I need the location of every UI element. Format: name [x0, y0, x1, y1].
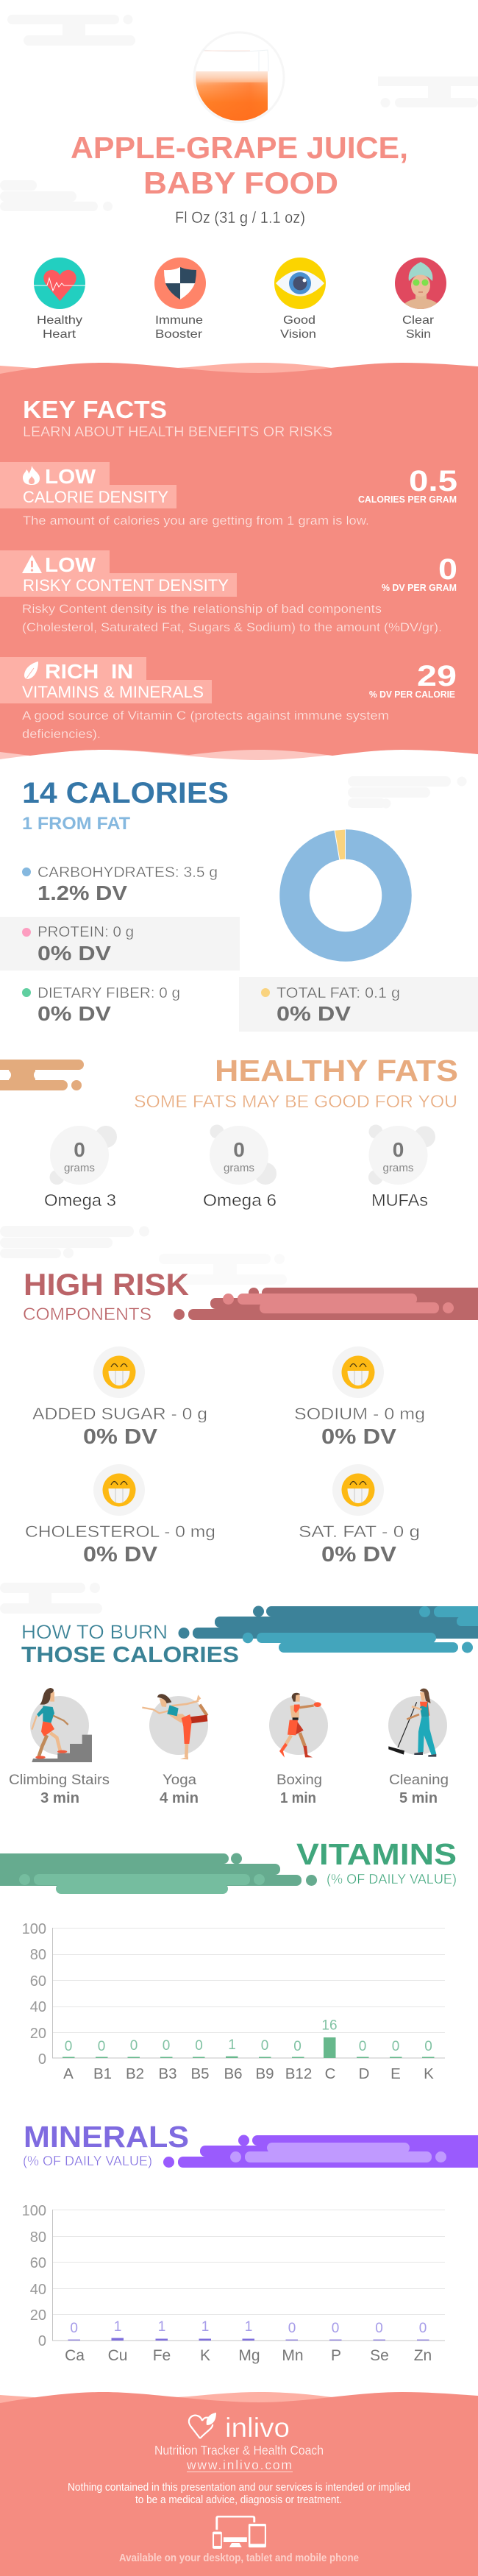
item: cholesterol: [25, 1464, 215, 1566]
bar chart: minerals: 0: [419, 2321, 427, 2336]
fact: rich in vitamins and minerals: RICH IN: [45, 660, 133, 683]
fact: risky content density: [0, 550, 457, 634]
fact: rich in vitamins and minerals: 29: [417, 660, 457, 692]
label: clear skin: Skin: [406, 328, 431, 341]
bar chart: minerals: 60: [30, 2255, 46, 2271]
label: clear skin: [402, 314, 435, 341]
bar chart: minerals: 0: [70, 2321, 78, 2336]
label: good vision: [280, 314, 316, 341]
item: added sugar: [32, 1346, 207, 1449]
bar chart: vitamins: 0: [163, 2038, 170, 2054]
bar chart: minerals: K: [200, 2347, 210, 2364]
donut chart: [294, 829, 397, 946]
fact: risky content density: 0: [438, 553, 457, 586]
bar chart: minerals: 20: [30, 2307, 46, 2324]
panel: minerals: [22, 2120, 478, 2364]
bar chart: vitamins: B3: [158, 2065, 177, 2082]
availability note: Available on your desktop, tablet and mobile phone: [119, 2552, 359, 2564]
decorative banner: green: [0, 1853, 317, 1894]
serving size: Fl Oz (31 g / 1.1 oz): [175, 208, 305, 227]
activity: boxing: 1 min: [280, 1790, 316, 1806]
bar chart: minerals: 1: [158, 2319, 165, 2335]
decorative banner: purple: [163, 2135, 478, 2168]
bar chart: vitamins: 60: [30, 1973, 46, 1990]
bar chart: vitamins: B12: [285, 2065, 312, 2082]
bar chart: vitamins: 0: [195, 2038, 203, 2054]
icon: flame: [23, 466, 40, 485]
benefit icons row: [34, 258, 446, 341]
fact: risky content density: % DV PER GRAM: [382, 582, 457, 593]
bar chart: minerals: Mn: [282, 2347, 304, 2364]
fact: calorie density: 0.5: [409, 465, 457, 497]
subheading: healthy fats: SOME FATS MAY BE GOOD FOR YOU: [134, 1092, 457, 1112]
bar chart: vitamins: 40: [30, 1999, 46, 2015]
title: APPLE-GRAPE JUICE,: [71, 130, 408, 165]
bar chart: minerals: 1: [201, 2319, 209, 2335]
legend: protein: 0% DV: [38, 942, 111, 965]
icon: warning triangle: [22, 555, 42, 573]
heading: healthy fats: HEALTHY FATS: [215, 1054, 458, 1087]
bar chart: vitamins: B5: [190, 2065, 210, 2082]
legend: protein: [22, 924, 134, 965]
fact: rich in vitamins and minerals: A good source of Vitamin C (protects against immune system: [22, 709, 389, 723]
label: immune booster: [155, 314, 203, 341]
panel: high risk components: [23, 1267, 478, 1566]
bar chart: vitamins: 0: [130, 2038, 138, 2054]
title: BABY FOOD: [143, 166, 338, 200]
panel: footer: [0, 2392, 478, 2576]
item: added sugar: 0% DV: [83, 1425, 158, 1449]
fact: calorie density: CALORIES PER GRAM: [358, 494, 457, 505]
title: [71, 130, 408, 200]
hero: juice glass photo: [194, 32, 284, 123]
activity: climbing stairs: [9, 1688, 110, 1806]
item: sodium: SODIUM - 0 mg: [294, 1405, 425, 1423]
stat: omega 3: 0: [74, 1138, 85, 1161]
stat: mufas: grams: [382, 1162, 413, 1174]
disclaimer: to be a medical advice, diagnosis or treatment.: [135, 2494, 342, 2506]
bar chart: minerals: Se: [370, 2347, 389, 2364]
heading: vitamins: VITAMINS: [296, 1837, 457, 1871]
bar chart: vitamins: B2: [126, 2065, 144, 2082]
tagline: Nutrition Tracker & Health Coach: [154, 2443, 324, 2458]
bar chart: minerals: P: [331, 2347, 341, 2364]
activity: yoga: Yoga: [163, 1772, 196, 1788]
icon: devices: [213, 2516, 266, 2549]
item: added sugar: ADDED SUGAR - 0 g: [32, 1405, 207, 1423]
fact: rich in vitamins and minerals: deficiencies).: [22, 728, 101, 741]
label: good vision: Vision: [280, 328, 316, 341]
stat: mufas: [368, 1124, 435, 1210]
activity: boxing: [269, 1693, 328, 1806]
fact: calorie density: CALORIE DENSITY: [23, 488, 168, 506]
panel: healthy fats: [0, 1054, 458, 1210]
bar chart: vitamins: 0: [261, 2038, 268, 2054]
stat: omega 3: Omega 3: [44, 1191, 116, 1210]
item: saturated fat: 0% DV: [321, 1543, 397, 1566]
bar chart: vitamins: 100: [22, 1921, 46, 1937]
legend: dietary fiber: [22, 985, 180, 1025]
item: saturated fat: [299, 1464, 420, 1566]
bar chart: vitamins: 0: [392, 2039, 399, 2054]
bar chart: minerals: Zn: [414, 2347, 432, 2364]
fact: rich in vitamins and minerals: VITAMINS & MINERALS: [22, 683, 204, 701]
fact: calorie density: The amount of calories you are getting from 1 gram is low.: [23, 514, 369, 528]
decorative banner: tan: [0, 1060, 84, 1090]
website link: www.inlivo.com: [186, 2458, 292, 2472]
legend: carbohydrates: 1.2% DV: [38, 881, 127, 904]
bar chart: vitamins: 0: [38, 2051, 46, 2068]
heading: how to burn: HOW TO BURN: [21, 1621, 168, 1643]
legend: carbohydrates: [22, 865, 218, 904]
bar chart: vitamins: B6: [224, 2065, 243, 2082]
item: sodium: 0% DV: [321, 1425, 397, 1449]
legend: total fat: 0% DV: [277, 1002, 351, 1025]
stat: mufas: MUFAs: [371, 1191, 428, 1210]
activity: yoga: [142, 1694, 208, 1806]
bar chart: vitamins: 0: [293, 2039, 302, 2054]
icon: immune booster: [154, 258, 206, 309]
fact: risky content density: RISKY CONTENT DENSITY: [23, 576, 229, 595]
bar chart: vitamins: 0: [65, 2039, 72, 2054]
bar chart: vitamins: C: [325, 2065, 336, 2082]
subheading: percent of daily value: (% OF DAILY VALUE): [23, 2153, 152, 2168]
label: clear skin: Clear: [402, 314, 435, 327]
activity: cleaning: 5 min: [399, 1790, 438, 1806]
activity: climbing stairs: Climbing Stairs: [9, 1772, 110, 1788]
heading: key facts: [23, 396, 332, 440]
item: cholesterol: CHOLESTEROL - 0 mg: [25, 1522, 215, 1541]
heading: those calories: THOSE CALORIES: [21, 1642, 239, 1667]
stat: omega 3: grams: [64, 1162, 95, 1174]
bar chart: minerals: 100: [22, 2203, 46, 2219]
bar chart: minerals: 80: [30, 2229, 46, 2246]
bar chart: minerals: 0: [288, 2321, 296, 2336]
label: healthy heart: Healthy: [37, 314, 82, 327]
bar chart: vitamins: B9: [255, 2065, 274, 2082]
bar chart: minerals: 0: [38, 2333, 46, 2349]
item: sodium: [294, 1346, 425, 1449]
legend: dietary fiber: DIETARY FIBER: 0 g: [38, 985, 180, 1001]
panel: how to burn calories: [9, 1605, 478, 1806]
fact: risky content density: Risky Content density is the relationship of bad components: [22, 603, 382, 616]
fact: rich in vitamins and minerals: [0, 657, 457, 741]
fact: rich in vitamins and minerals: % DV PER CALORIE: [369, 689, 455, 700]
legend: dietary fiber: 0% DV: [38, 1002, 111, 1025]
bar chart: minerals: Fe: [153, 2347, 171, 2364]
bar chart: vitamins: 80: [30, 1947, 46, 1963]
stat: omega 6: Omega 6: [203, 1191, 277, 1210]
activity: yoga: 4 min: [160, 1790, 199, 1806]
bar chart: vitamins: 0: [359, 2039, 366, 2054]
bar chart: minerals: 0: [375, 2321, 383, 2336]
bar chart: minerals: Mg: [238, 2347, 260, 2364]
label: immune booster: Immune: [155, 314, 203, 327]
legend: total fat: TOTAL FAT: 0.1 g: [277, 985, 400, 1001]
activity: boxing: Boxing: [277, 1772, 322, 1788]
heading: key facts: KEY FACTS: [23, 396, 167, 423]
stat: omega 6: grams: [224, 1162, 254, 1174]
bar chart: vitamins: E: [390, 2065, 401, 2082]
item: cholesterol: 0% DV: [83, 1543, 158, 1566]
activity: climbing stairs: 3 min: [40, 1790, 79, 1806]
stat: mufas: 0: [393, 1138, 404, 1161]
label: immune booster: Booster: [155, 328, 203, 341]
subheading: percent of daily value: (% OF DAILY VALUE): [327, 1871, 457, 1887]
bar chart: minerals: Cu: [108, 2347, 127, 2364]
bar chart: minerals: Ca: [65, 2347, 85, 2364]
label: good vision: Good: [283, 314, 315, 327]
label: healthy heart: [37, 314, 82, 341]
stat: omega 6: 0: [233, 1138, 245, 1161]
activity: cleaning: [388, 1689, 449, 1806]
decorative banner: teal: [178, 1605, 478, 1653]
heading: key facts: LEARN ABOUT HEALTH BENEFITS OR RISKS: [23, 424, 332, 440]
subheading: components: COMPONENTS: [23, 1305, 151, 1324]
subheading: from fat: 1 FROM FAT: [22, 814, 130, 834]
activity: cleaning: Cleaning: [389, 1772, 449, 1788]
fact: calorie density: LOW: [45, 465, 96, 488]
heading: minerals: MINERALS: [24, 2120, 189, 2154]
label: healthy heart: Heart: [43, 328, 76, 341]
bar chart: vitamins: 0: [98, 2039, 105, 2054]
bar chart: minerals: 40: [30, 2282, 46, 2298]
fact: risky content density: (Cholesterol, Saturated Fat, Sugars & Sodium) to the amount (%DV/gr).: [22, 621, 442, 634]
bar chart: vitamins: 0: [424, 2039, 432, 2054]
panel: calories: [0, 777, 478, 1032]
bar chart: minerals: 1: [245, 2319, 252, 2335]
bar chart: vitamins: D: [359, 2065, 369, 2082]
bar chart: minerals: 0: [332, 2321, 339, 2336]
icon: clear skin: [395, 258, 446, 309]
panel: key facts: [0, 363, 478, 760]
decorative banner: red: [174, 1288, 478, 1320]
bar chart: vitamins: [22, 1921, 445, 2082]
heading: high risk: HIGH RISK: [24, 1267, 189, 1302]
disclaimer: Nothing contained in this presentation and our services is intended or implied: [68, 2482, 410, 2494]
icon: leaf: [24, 661, 38, 679]
bar chart: minerals: 1: [114, 2319, 121, 2335]
bar chart: minerals: [22, 2203, 445, 2364]
legend: carbohydrates: CARBOHYDRATES: 3.5 g: [38, 865, 218, 881]
bar chart: vitamins: 16: [321, 2018, 338, 2034]
stat: omega 3: [44, 1126, 117, 1210]
bar chart: vitamins: 20: [30, 2026, 46, 2042]
item: saturated fat: SAT. FAT - 0 g: [299, 1522, 420, 1541]
logo: inlivo: inlivo: [225, 2413, 290, 2443]
heading: calories: 14 CALORIES: [22, 777, 229, 809]
bar chart: vitamins: B1: [93, 2065, 112, 2082]
fact: risky content density: LOW: [45, 553, 96, 576]
bar chart: vitamins: A: [63, 2065, 74, 2082]
bar chart: vitamins: 1: [228, 2037, 236, 2053]
icon: healthy heart: [34, 258, 85, 309]
bar chart: vitamins: K: [424, 2065, 434, 2082]
legend: protein: PROTEIN: 0 g: [38, 924, 134, 940]
disclaimer: [68, 2482, 410, 2506]
panel: vitamins: [0, 1837, 457, 2082]
logo: inlivo: [189, 2413, 290, 2443]
stat: omega 6: [203, 1124, 277, 1210]
fact: calorie density: [0, 462, 457, 528]
legend: total fat: [261, 985, 400, 1025]
icon: good vision: [274, 258, 326, 309]
